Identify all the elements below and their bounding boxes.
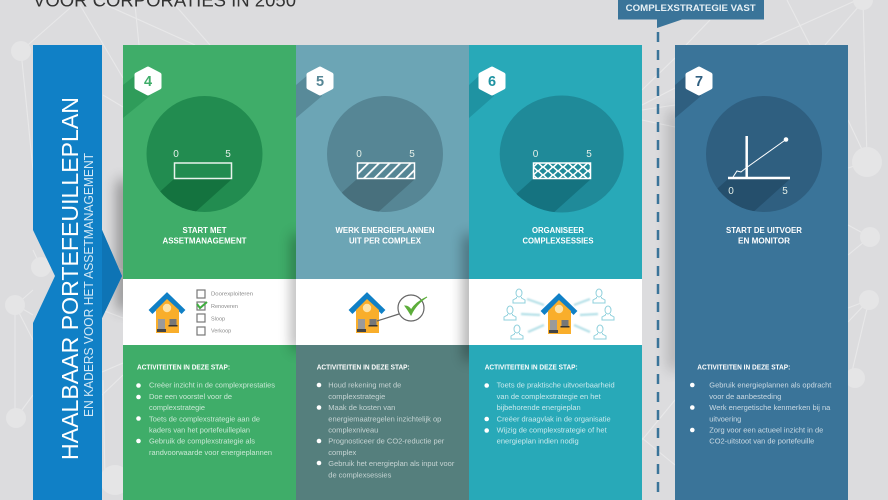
score bar 0-5 lattice: 0	[533, 149, 539, 160]
icon: monitor graph	[728, 136, 790, 197]
badge 5: 5	[316, 74, 324, 90]
icon: house with checklist: Renoveren	[211, 304, 238, 310]
shadow beside band	[118, 180, 130, 310]
heading step 7: START DE UITVOER	[726, 226, 802, 235]
badge 4: 4	[144, 74, 152, 90]
icon: house with magnifier	[350, 295, 427, 333]
shadow between step 6 and step 7	[668, 110, 682, 370]
callout: complexstrategie vast: COMPLEXSTRATEGIE VAST	[626, 3, 756, 13]
heading step 7	[726, 226, 802, 246]
activities step 4: Doe een voorstel voor de	[149, 394, 232, 401]
heading step 6: COMPLEXSESSIES	[522, 236, 594, 246]
dashed divider line	[657, 32, 659, 500]
activities step 6: Creëer draagvlak in de organisatie	[497, 416, 611, 424]
activities step 7	[690, 364, 831, 446]
activities step 5: Gebruik het energieplan als input voor	[328, 461, 455, 468]
score bar 0-5 hatched: 0	[356, 149, 362, 160]
activities step 4: ACTIVITEITEN IN DEZE STAP:	[137, 364, 230, 372]
heading step 6: ORGANISEER	[532, 226, 584, 235]
heading step 6	[522, 226, 594, 246]
panel: step 4	[123, 45, 848, 500]
score bar 0-5 lattice: 5	[586, 149, 592, 160]
activities step 6: van de complexstrategie en het	[497, 394, 601, 401]
banner: haalbaar portefeuilleplan: EN KADERS VOOR HET ASSETMANAGEMENT	[81, 153, 96, 417]
banner: haalbaar portefeuilleplan	[33, 45, 122, 500]
activities step 5: complexstrategie	[328, 394, 385, 401]
panel: step 7	[675, 45, 848, 500]
heading step 4: ASSETMANAGEMENT	[162, 236, 247, 246]
panel: step 5	[296, 45, 848, 500]
heading step 5	[336, 226, 435, 246]
activities step 5: Maak de kosten van	[328, 405, 395, 412]
heading step 5: WERK ENERGIEPLANNEN	[336, 226, 435, 235]
activities step 6: bijbehorende energieplan	[497, 405, 581, 412]
activities step 7: Werk energetische kenmerken bij na	[709, 405, 830, 412]
activities step 5	[317, 364, 455, 480]
icon: monitor graph: 0	[728, 186, 734, 197]
activities step 5: complexniveau	[328, 428, 378, 434]
activities step 5: Prognosticeer de CO2-reductie per	[328, 438, 445, 446]
activities step 4: kaders van het portefeuilleplan	[149, 428, 250, 434]
activities step 4: complexstrategie	[149, 405, 205, 412]
activities step 5: de complexsessies	[328, 472, 392, 480]
activities step 5: Houd rekening met de	[328, 382, 401, 390]
activities step 6	[484, 364, 615, 446]
icon: house with checklist	[150, 290, 253, 335]
badge 4	[136, 68, 160, 94]
icon: house with checklist: Verkoop	[211, 328, 231, 334]
activities step 7: Zorg voor een actueel inzicht in de	[709, 428, 823, 434]
heading step 4: START MET	[182, 226, 227, 235]
icon: house with people	[504, 289, 614, 339]
banner: haalbaar portefeuilleplan: HAALBAAR PORTEFEUILLEPLAN	[57, 97, 83, 460]
score bar 0-5 empty: 0	[173, 149, 179, 160]
activities step 4: Toets de complexstrategie aan de	[149, 416, 260, 424]
activities step 6: ACTIVITEITEN IN DEZE STAP:	[485, 364, 578, 372]
activities step 7: ACTIVITEITEN IN DEZE STAP:	[697, 364, 790, 372]
score bar 0-5 lattice	[533, 149, 592, 178]
score bar 0-5 hatched: 5	[409, 149, 415, 160]
activities step 7: Gebruik energieplannen als opdracht	[709, 382, 831, 390]
badge 5	[308, 68, 332, 94]
activities step 4: Gebruik de complexstrategie als	[149, 438, 256, 446]
activities step 4: Creëer inzicht in de complexprestaties	[149, 382, 276, 390]
activities step 5: ACTIVITEITEN IN DEZE STAP:	[317, 364, 410, 372]
score bar 0-5 empty	[173, 149, 232, 178]
icon: monitor graph: 5	[782, 186, 788, 197]
score bar 0-5 empty: 5	[225, 149, 231, 160]
activities step 4: randvoorwaarde voor energieplannen	[149, 450, 272, 457]
badge 6: 6	[488, 74, 496, 90]
score bar 0-5 hatched	[356, 149, 415, 178]
icon: house with checklist: Doorexploiteren	[211, 292, 253, 298]
badge 7: 7	[695, 74, 703, 90]
activities step 6: Toets de praktische uitvoerbaarheid	[497, 382, 615, 390]
activities step 7: voor de aanbesteding	[709, 394, 781, 401]
badge 6	[480, 68, 504, 94]
activities step 7: uitvoering	[709, 416, 741, 424]
heading step 5: UIT PER COMPLEX	[349, 236, 422, 246]
activities step 7: CO2-uitstoot van de portefeuille	[709, 438, 814, 446]
activities step 6: Wijzig de complexstrategie of het	[497, 428, 607, 434]
activities step 4	[136, 364, 276, 457]
heading step 4	[162, 226, 247, 246]
activities step 5: energiemaatregelen inzichtelijk op	[328, 416, 441, 424]
icon: house with checklist: Sloop	[211, 316, 225, 322]
callout: complexstrategie vast	[618, 0, 764, 28]
heading step 7: EN MONITOR	[738, 236, 790, 246]
activities step 6: energieplan indien nodig	[497, 438, 579, 446]
activities step 5: complex	[328, 450, 357, 457]
badge 7	[688, 68, 710, 94]
panel: step 6	[469, 45, 848, 500]
